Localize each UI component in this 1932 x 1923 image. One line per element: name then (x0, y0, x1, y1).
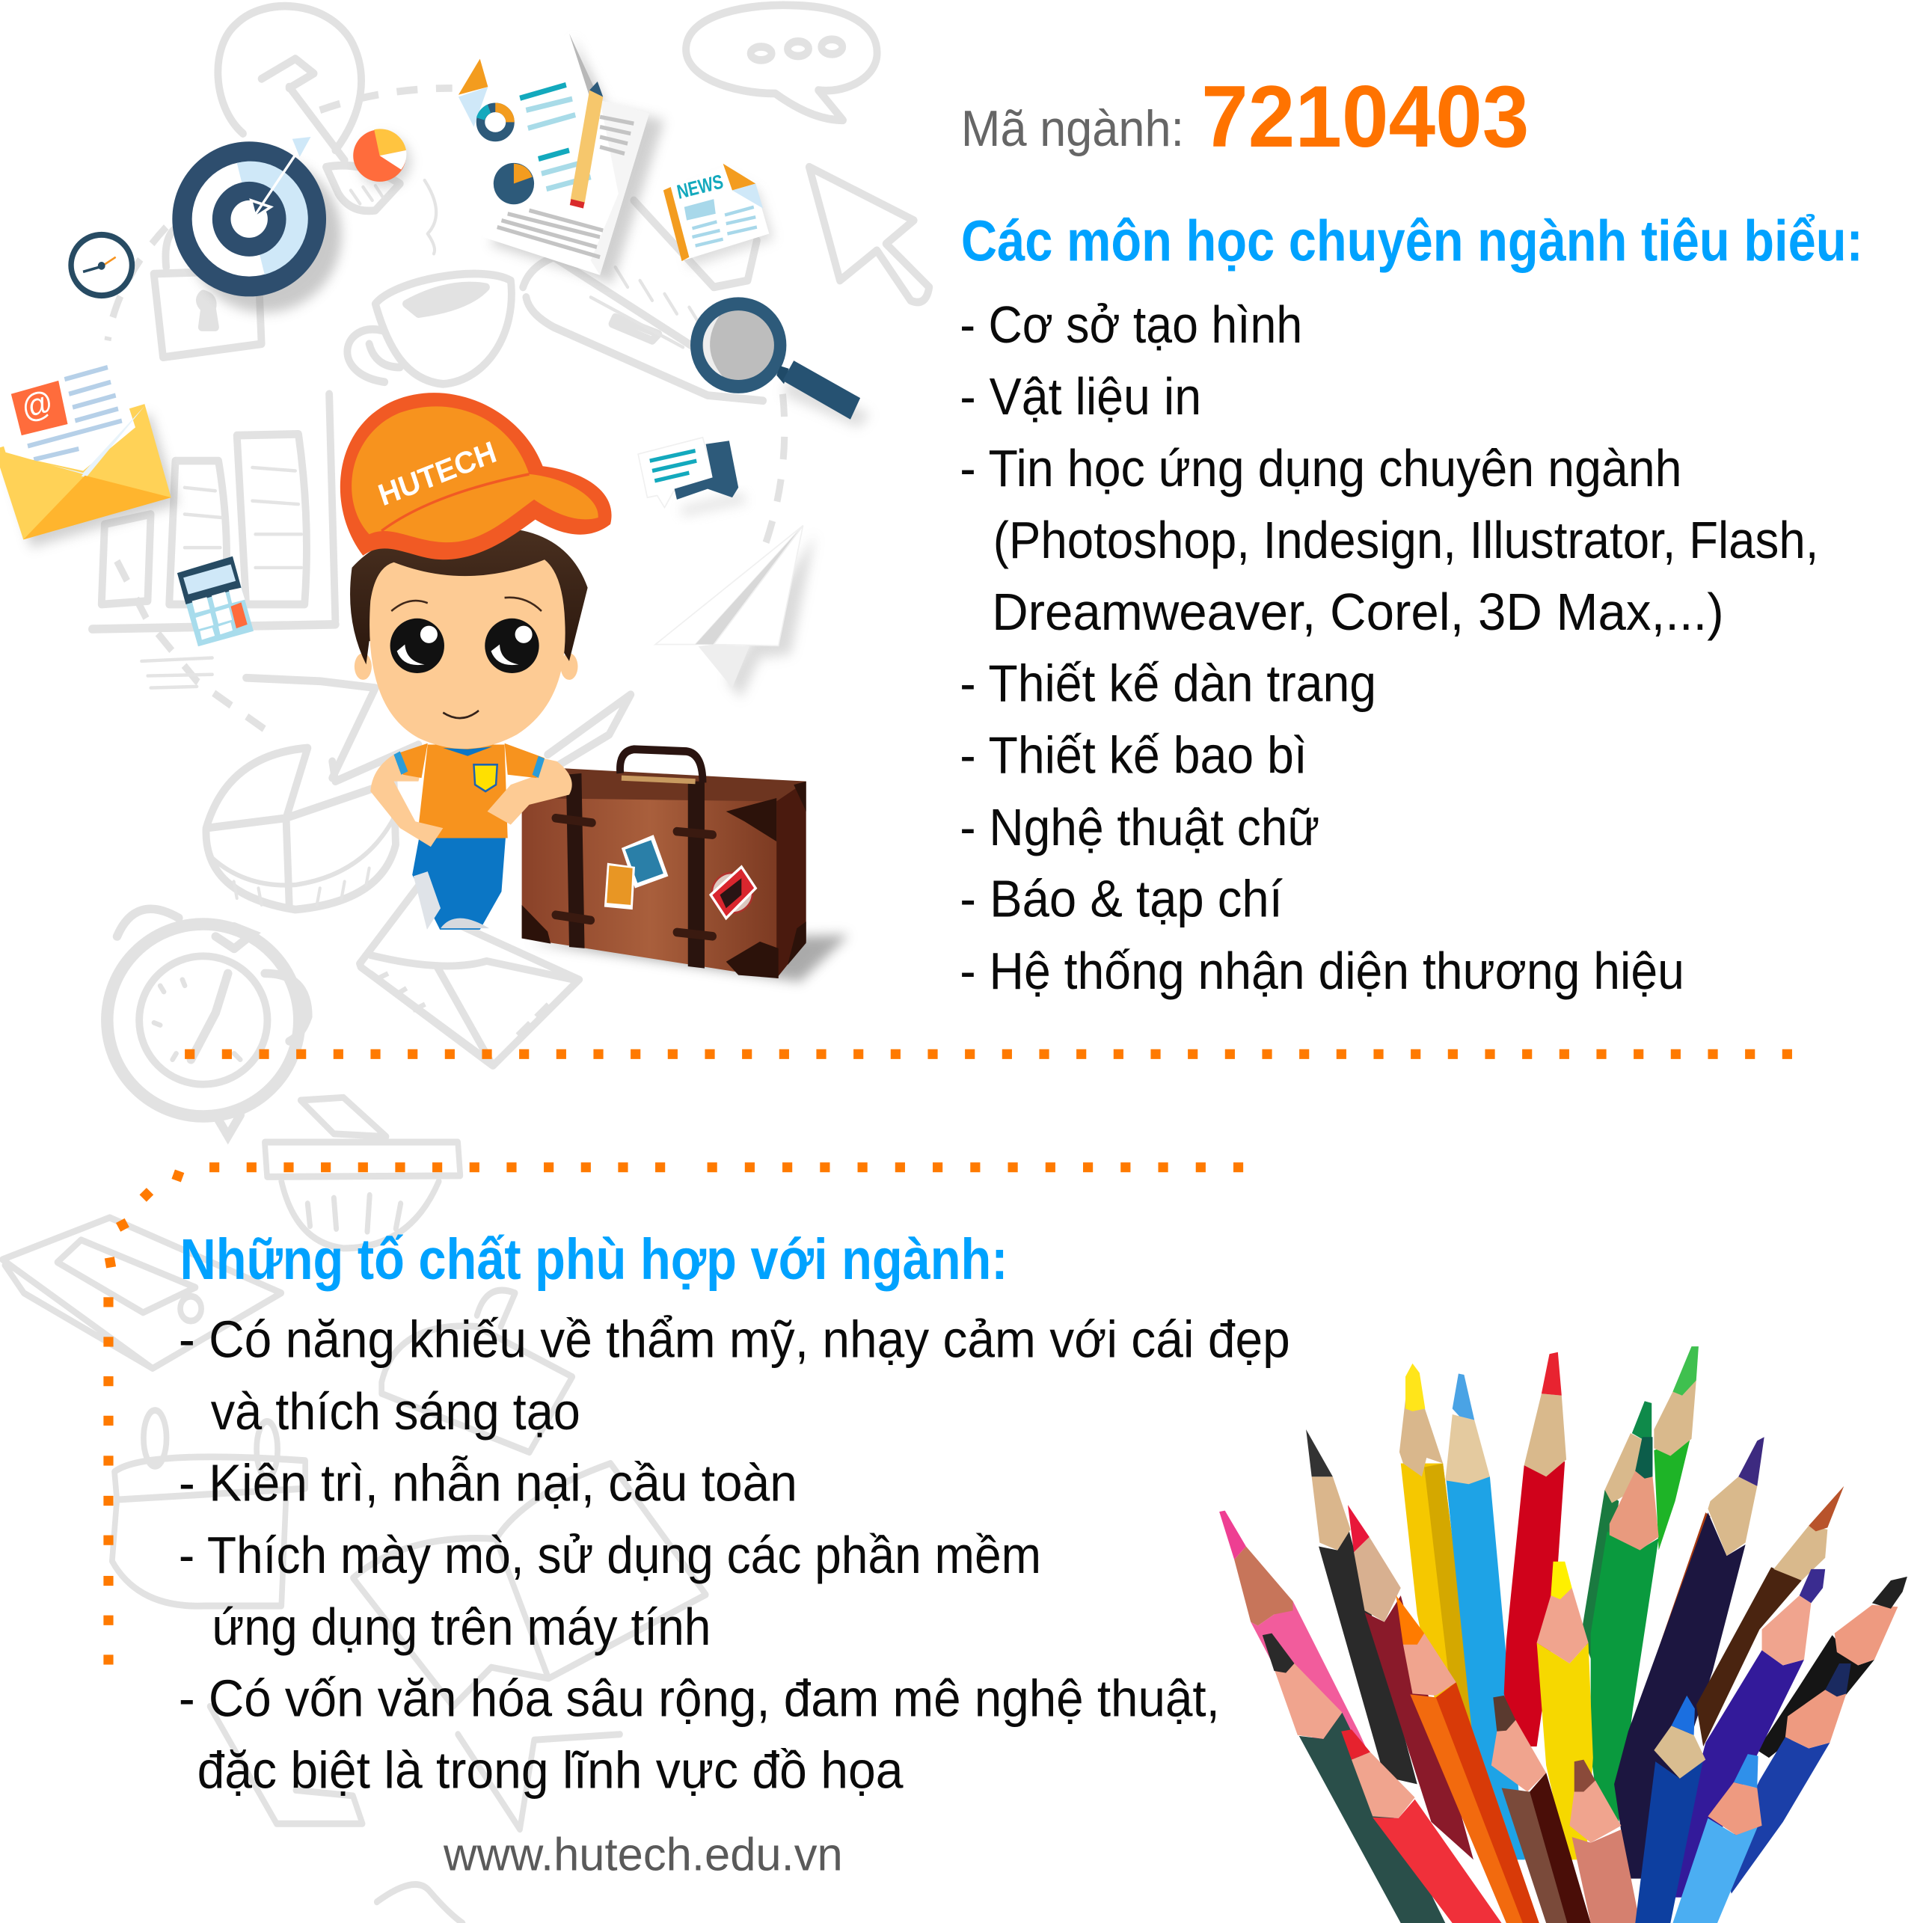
pencil: bright green (1654, 1346, 1699, 1551)
pencil: black right (1757, 1577, 1907, 1758)
mascot: legs (412, 835, 506, 930)
pencil: dark green back (1581, 1401, 1652, 1671)
icon: magnifying glass (696, 304, 871, 427)
website url: www.hutech.edu.vn (443, 1829, 843, 1881)
sketch: scroll (210, 1706, 620, 1923)
pencils photo (1219, 1346, 1907, 1923)
mascot: right arm (488, 745, 572, 825)
mascot: face (369, 559, 565, 749)
icon: calculator (177, 556, 254, 646)
qualities list: - Thích mày mò, sử dụng các phần mềm (179, 1526, 1041, 1584)
pencil: salmon front (1569, 1760, 1640, 1923)
pencil: light blue front (1672, 1754, 1762, 1923)
sketch: light bulb (218, 6, 436, 254)
pencil: brown front (1491, 1696, 1591, 1923)
mascot: smile (443, 711, 479, 718)
sketch: dashed orbit (108, 88, 785, 738)
background sketches: upper doodles (92, 5, 929, 910)
subjects list: - Vật liệu in (960, 367, 1201, 426)
mascot: torso (417, 745, 508, 838)
qualities list: - Có năng khiếu về thẩm mỹ, nhạy cảm với cái đẹp (179, 1310, 1290, 1369)
pencil: black left (1306, 1429, 1417, 1784)
mascot: ears (355, 653, 372, 680)
sketch: books (92, 394, 335, 688)
icon: paper airplane (655, 526, 815, 698)
label: NEWS: NEWS (675, 171, 726, 203)
foreground icons, top left (0, 34, 871, 698)
icon: chat cards (638, 438, 748, 515)
dotted frame: lower section (103, 1168, 1247, 1665)
pencil: royal blue front (1635, 1696, 1705, 1923)
mascot: left eye (390, 619, 444, 673)
sketch: tablet (2, 1218, 281, 1369)
pencil: navy (1614, 1437, 1764, 1879)
pencil: orange (1396, 1595, 1539, 1923)
sketch: padlock (154, 227, 262, 358)
icon: documents with charts and pencil (459, 34, 664, 283)
label: Mã ngành: Mã ngành: (961, 101, 1184, 157)
subjects list: (Photoshop, Indesign, Illustrator, Flash, (993, 511, 1818, 569)
sketch: bowl (265, 1097, 460, 1248)
sketch: coffee cup (347, 274, 512, 384)
pencil: blue right (1722, 1663, 1851, 1894)
subjects list: - Báo & tạp chí (960, 870, 1283, 928)
sketch: envelope (360, 877, 579, 1066)
sketch: cursor arrow (809, 167, 929, 302)
sketch: cooking pot (112, 1411, 305, 1606)
qualities list: và thích sáng tạo (211, 1382, 580, 1441)
pencil: blue back (1445, 1373, 1525, 1859)
subjects list: - Nghệ thuật chữ (960, 798, 1319, 856)
pencil: yellow front (1537, 1562, 1593, 1859)
pencil: red front (1341, 1729, 1502, 1923)
code number: 7210403 (1201, 67, 1529, 165)
sticker: orange stamp (604, 863, 635, 910)
background sketches: lower doodles (2, 1097, 706, 1923)
icon: suitcase (522, 749, 849, 981)
sketch: laptop (523, 200, 763, 401)
qualities list (179, 1310, 1290, 1799)
label: @: @ (18, 383, 57, 428)
mascot: eyebrows (391, 598, 542, 611)
subjects list: - Thiết kế bao bì (960, 726, 1307, 785)
heading: suitable qualities: Những tố chất phù hợp với ngành: (180, 1227, 1008, 1292)
sketch: box (381, 1290, 572, 1453)
subjects list: Dreamweaver, Corel, 3D Max,...) (992, 583, 1724, 641)
qualities list: - Kiên trì, nhẫn nại, cầu toàn (179, 1453, 797, 1512)
icon: newspaper (663, 164, 774, 267)
pencil: pink (1219, 1511, 1417, 1859)
sketch: pie chart and pen (206, 678, 631, 910)
pencil: yellow back (1399, 1364, 1478, 1746)
pencil: green front (1591, 1437, 1659, 1822)
pencil: dark green left (1263, 1634, 1445, 1923)
dotted divider (185, 1051, 1797, 1057)
subjects list: - Tin học ứng dụng chuyên ngành (960, 439, 1682, 497)
subjects list: - Cơ sở tạo hình (960, 295, 1302, 354)
icon: wall clock (68, 232, 135, 298)
qualities list: - Có vốn văn hóa sâu rộng, đam mê nghệ thuật, (179, 1669, 1220, 1728)
cap label: HUTECH: HUTECH (374, 435, 500, 513)
qualities list: đặc biệt là trong lĩnh vực đồ họa (197, 1740, 904, 1799)
sketch: open book (353, 1464, 706, 1706)
mascot character (340, 393, 612, 930)
mascot: left arm (370, 745, 443, 847)
sketch: alarm clock (107, 909, 308, 1136)
mascot: hair (350, 527, 588, 664)
pencil: red back (1504, 1352, 1566, 1746)
sticker: blue stamp (622, 835, 668, 889)
subjects list: - Thiết kế dàn trang (960, 654, 1376, 712)
qualities list: ứng dụng trên máy tính (212, 1598, 711, 1656)
subjects list: - Hệ thống nhận diện thương hiệu (960, 942, 1684, 1000)
sticker: red badge (712, 873, 752, 913)
subjects list (960, 295, 1818, 1000)
pencil: brown right (1696, 1486, 1844, 1746)
sketch: speech bubble (686, 5, 877, 120)
mascot: right eye (485, 619, 539, 673)
pencil: purple (1666, 1569, 1825, 1898)
major code line (961, 67, 1529, 165)
icon: email envelope (0, 342, 179, 548)
icon: target with arrow (172, 137, 342, 313)
icon: pie chart (353, 129, 411, 188)
pencil: dark red (1348, 1505, 1473, 1859)
mascot: cap (340, 393, 612, 559)
suitcase and mascot (340, 393, 849, 981)
